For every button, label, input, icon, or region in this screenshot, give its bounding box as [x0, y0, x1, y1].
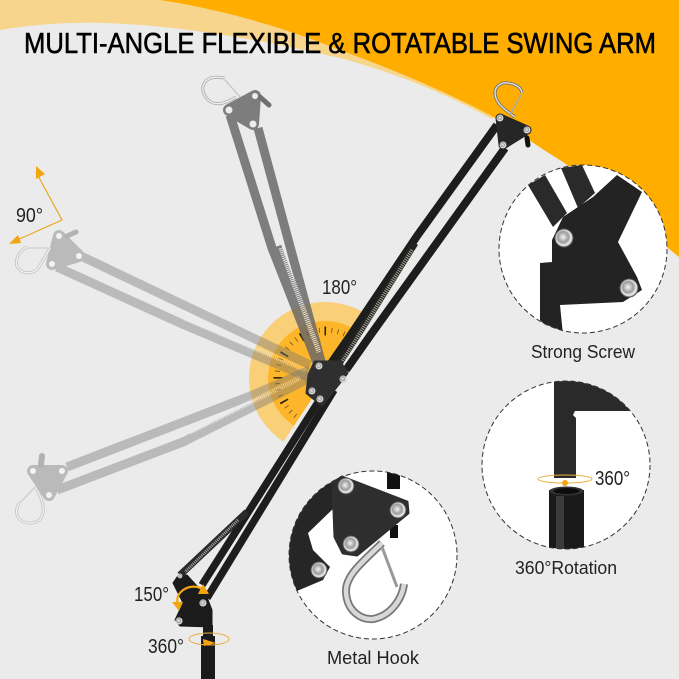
label: 90 degrees: 90°: [16, 205, 43, 227]
lower spring: [180, 512, 247, 575]
bottom bracket: [173, 574, 212, 627]
label: metal hook: Metal Hook: [327, 648, 420, 668]
ghost hook: upper position: [203, 77, 240, 104]
label: 360 rotation: 360°Rotation: [515, 558, 617, 578]
ghost hook: left position: [16, 247, 50, 273]
label: 360 degrees base: 360°: [148, 636, 184, 658]
upper arm: [325, 125, 497, 372]
upper spring: [340, 243, 415, 362]
top plate and hook: [495, 83, 530, 148]
ring: 360 degree rotation: [189, 633, 229, 646]
ghost arm: lower position: [30, 370, 310, 498]
centre plate: [307, 362, 347, 405]
label: 360 degrees detail: 360°: [595, 468, 630, 490]
main swing arm: [173, 83, 530, 679]
label: strong screw: Strong Screw: [531, 342, 636, 362]
pole: [201, 625, 215, 679]
arrow: 150 degree rotation: [172, 584, 209, 611]
rotation dial: [249, 302, 362, 442]
label: 180 degrees: 180°: [322, 277, 357, 299]
orange corner: [160, 0, 679, 257]
lower arms: [202, 396, 322, 585]
light orange band: [0, 0, 560, 119]
detail circle: metal hook: [280, 468, 457, 639]
ghost hook: lower position: [17, 487, 43, 523]
detail circle: strong screw: [499, 165, 667, 335]
ghost arm: left position: [49, 232, 310, 378]
label: 150 degrees: 150°: [134, 584, 169, 606]
ghost arm: upper position: [226, 93, 322, 365]
arrows: 90 degree angle: [9, 166, 62, 244]
detail circle: 360 rotation: [482, 375, 650, 555]
